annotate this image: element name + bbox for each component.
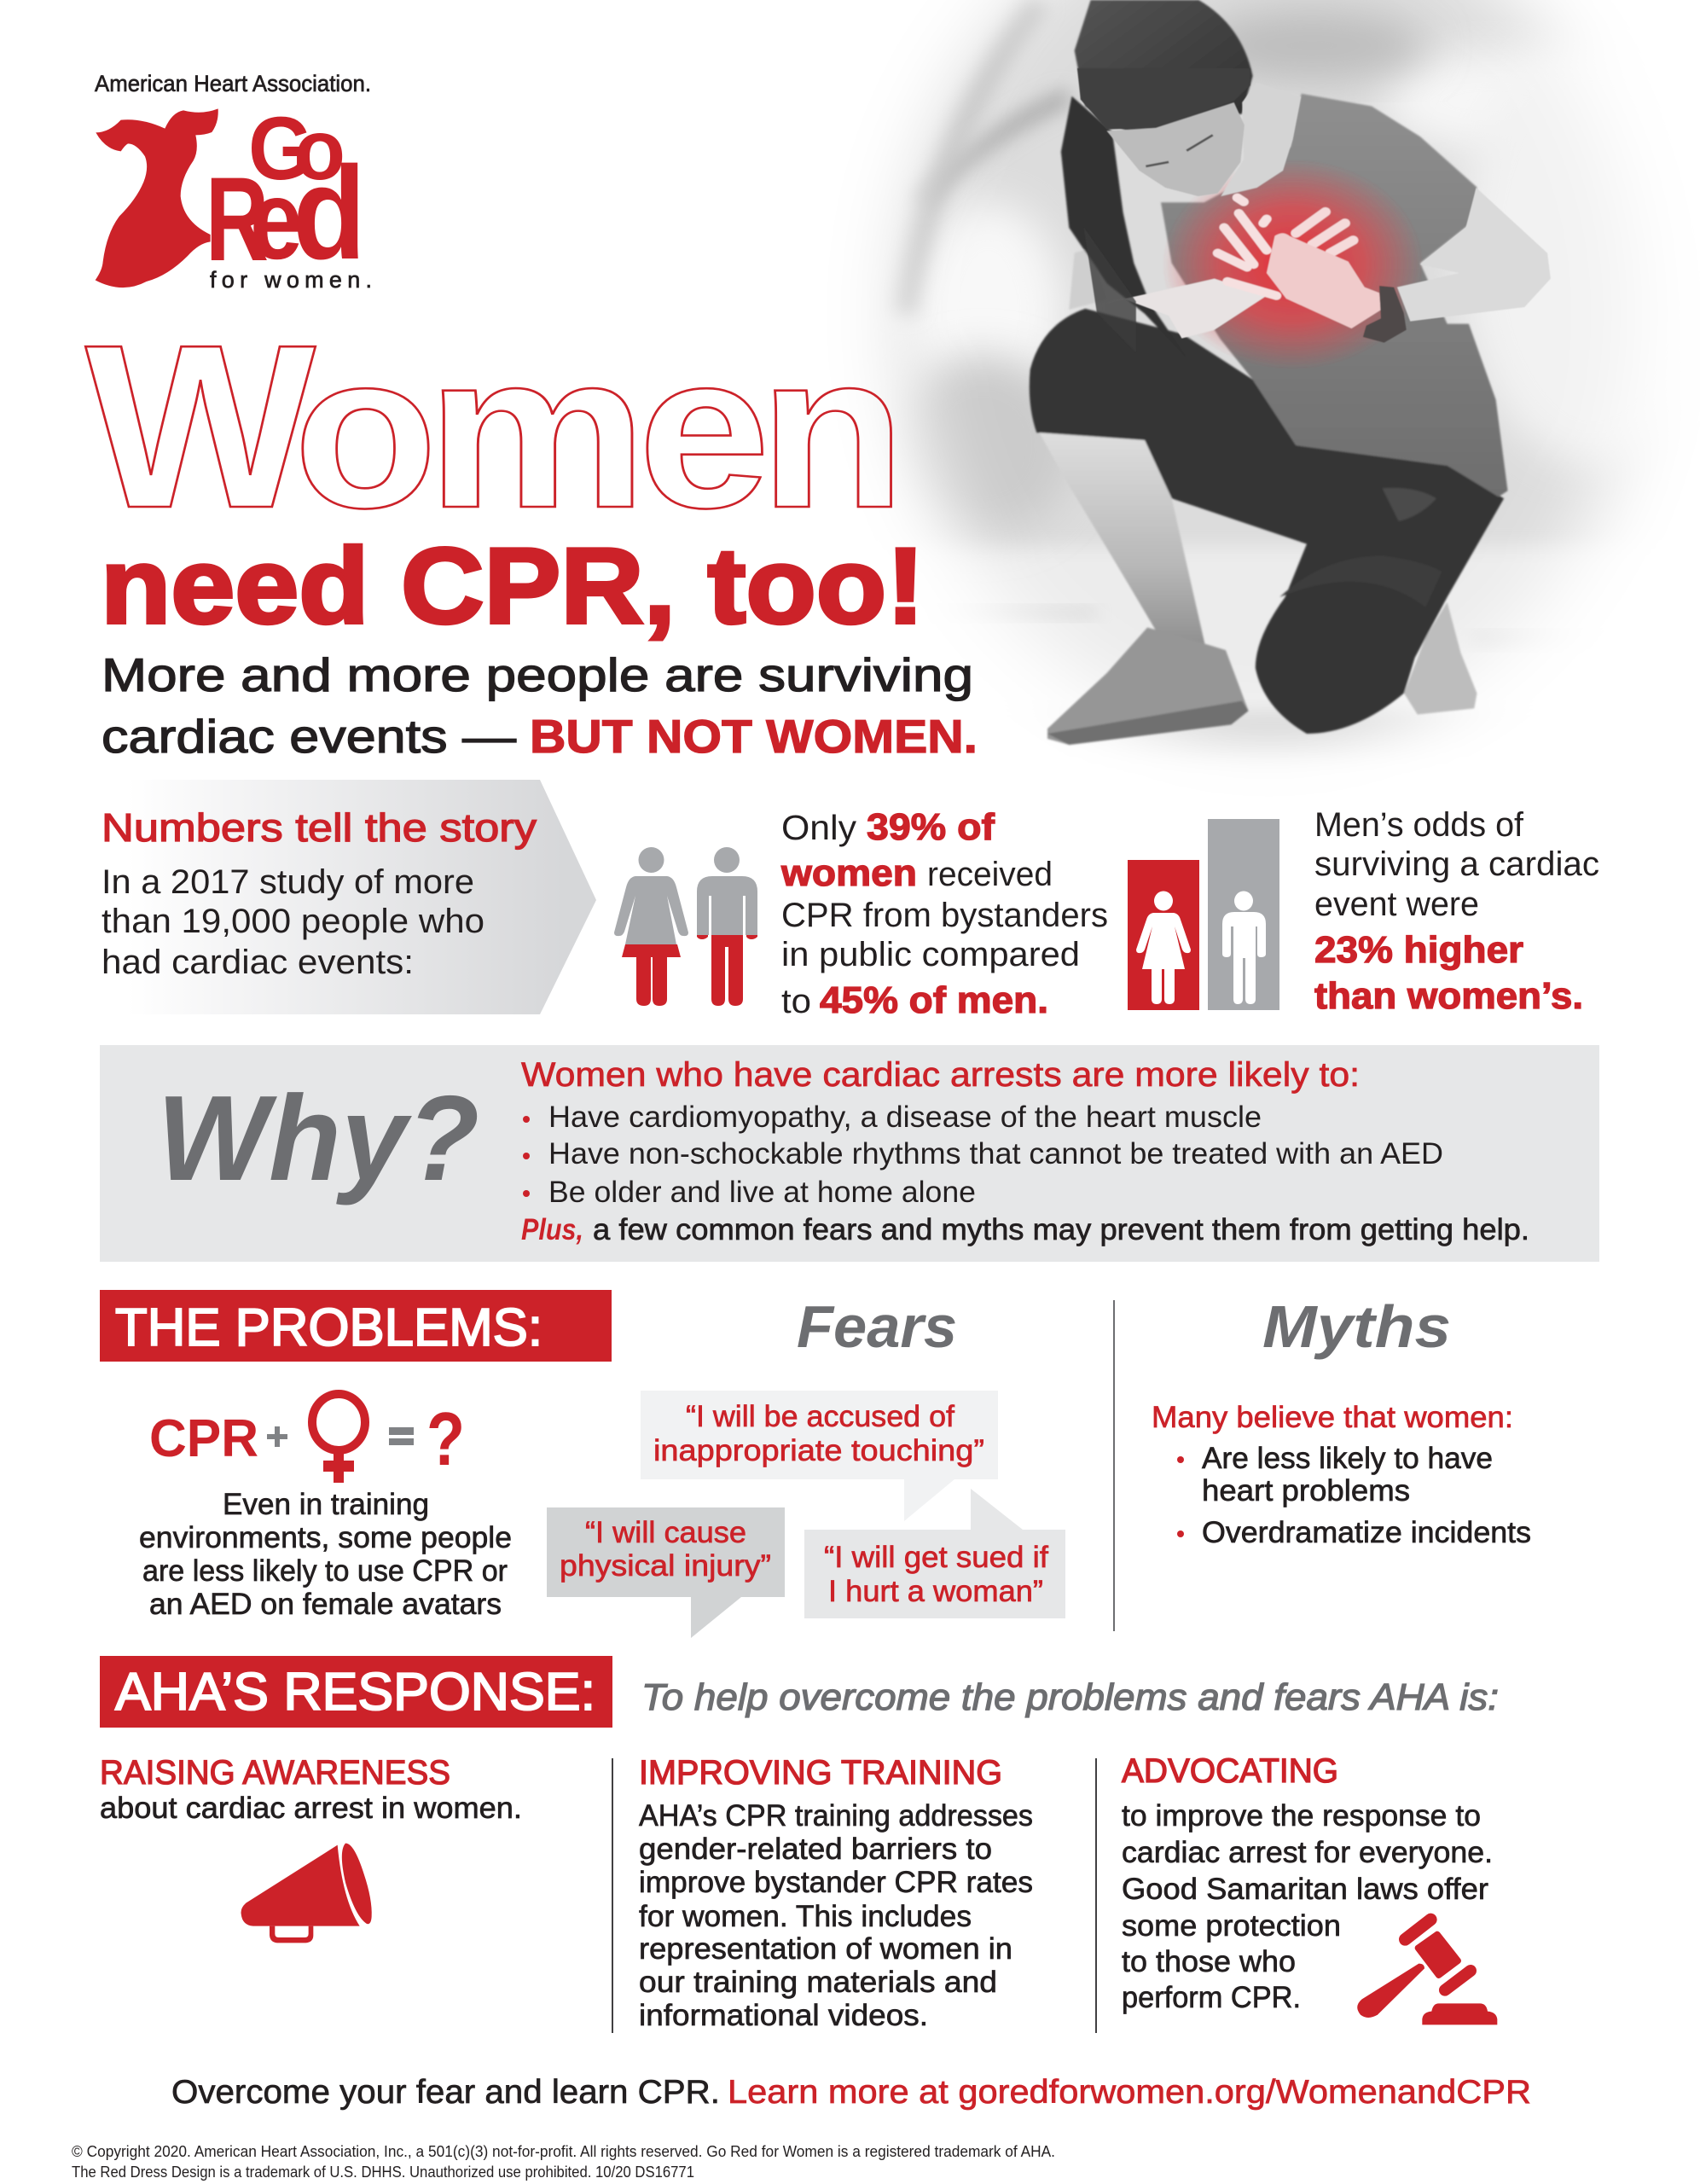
text: 39% of women received CPR: 45% of men. <box>820 979 1048 1021</box>
shin <box>1039 433 1207 653</box>
text: 39% of women received CPR: CPR from bystanders <box>781 897 1108 934</box>
call to action <box>171 2074 1531 2111</box>
left hand fingers <box>1218 198 1276 296</box>
shirt <box>1161 94 1508 497</box>
icon: woman in red bar <box>1136 891 1191 1004</box>
heading: the problems <box>100 1290 612 1362</box>
text: plus: Plus, <box>521 1213 583 1246</box>
title: Women outlined: n <box>759 307 906 554</box>
column: advocating: some protection <box>1122 1909 1341 1943</box>
logo: American Heart Association Go Red for Women: for women. <box>210 267 372 293</box>
speech bubble: physical injury <box>547 1507 785 1638</box>
subtitle: BUT NOT WOMEN. <box>530 710 978 763</box>
title: Women outlined: m <box>426 307 647 554</box>
left forearm <box>1100 279 1267 339</box>
title: Women outlined <box>85 296 906 556</box>
text: 39% of women received CPR: women <box>780 852 917 894</box>
hair <box>1075 0 1253 132</box>
back shoe <box>1404 602 1477 714</box>
column: raising awareness: RAISING AWARENESS <box>100 1754 450 1792</box>
title: Women outlined: o <box>293 307 438 554</box>
Go Red wordmark <box>206 99 366 287</box>
text: myths list: heart problems <box>1202 1474 1410 1507</box>
heading: fears: Fears <box>797 1293 957 1360</box>
speech bubble: sued: I hurt a woman” <box>828 1575 1043 1608</box>
text: training environments <box>139 1488 512 1621</box>
title: need CPR, too!: need CPR, too! <box>101 526 925 646</box>
text: training environments: are less likely to use CPR or <box>142 1554 508 1588</box>
leggings <box>1030 309 1504 734</box>
column: improving training: for women. This includes <box>639 1900 972 1933</box>
icon: megaphone <box>241 1844 372 1943</box>
panel: numbers tell the story arrow: had cardiac events: <box>102 944 414 981</box>
text: training environments: an AED on female avatars <box>149 1588 502 1621</box>
call to action: Learn more at goredforwomen.org/WomenandCPR <box>728 2074 1531 2111</box>
column: advocating: Good Samaritan laws offer <box>1122 1873 1488 1906</box>
call to action: Overcome your fear and learn CPR. <box>171 2074 720 2111</box>
shoe <box>1047 627 1249 745</box>
panel: numbers tell the story arrow: In a 2017 study of more <box>102 863 474 901</box>
text: men's odds 23% higher: Men’s odds of <box>1314 806 1524 844</box>
speech bubble: accused of inappropriate touching: “I will be accused of <box>686 1400 954 1433</box>
column: raising awareness <box>100 1754 522 1943</box>
equation: CPR + female symbol = ? <box>149 1394 465 1483</box>
neck <box>1221 83 1301 196</box>
fingers behind <box>1296 212 1353 253</box>
watch <box>1363 286 1407 343</box>
panel: numbers tell the story arrow <box>102 780 596 1014</box>
ponytail over arm <box>1084 228 1136 352</box>
column: advocating: ADVOCATING <box>1122 1752 1338 1790</box>
title: Women outlined: W <box>85 296 318 556</box>
column: improving training <box>639 1754 1033 2032</box>
column: advocating: to improve the response to <box>1122 1799 1481 1833</box>
Go Red wordmark: d <box>293 139 366 287</box>
text: men's odds 23% higher: surviving a cardiac <box>1314 845 1599 883</box>
text: 39% of women received CPR <box>780 806 1108 1021</box>
text: myths list: Are less likely to have <box>1202 1442 1493 1475</box>
column: advocating: perform CPR. <box>1122 1981 1301 2014</box>
column: improving training: informational videos. <box>639 1999 928 2032</box>
heading: myths: Myths <box>1262 1293 1451 1360</box>
subtitle: cardiac events — <box>102 710 516 763</box>
column: improving training: gender-related barriers to <box>639 1833 992 1866</box>
speech bubble: sued <box>804 1489 1065 1618</box>
icon: woman and man filled to 39% and 45% <box>614 847 757 1006</box>
bullet list: Be older and live at home alone <box>548 1176 976 1209</box>
title: Women outlined: e <box>638 307 770 554</box>
column: advocating: cardiac arrest for everyone. <box>1122 1836 1493 1869</box>
text: men's odds 23% higher: than women’s. <box>1314 975 1583 1017</box>
text: myths list <box>1152 1401 1531 1549</box>
column: advocating <box>1122 1752 1497 2024</box>
logo: American Heart Association Go Red for Women <box>95 71 372 293</box>
icon: gavel <box>1357 1920 1497 2024</box>
heading: the problems: THE PROBLEMS: <box>115 1298 542 1357</box>
heading: AHA's response: AHA’S RESPONSE: <box>115 1663 595 1722</box>
subtitle <box>102 648 978 763</box>
photo: woman kneeling clutching her chest <box>876 0 1632 759</box>
column: advocating: to those who <box>1122 1945 1296 1978</box>
red dress icon <box>96 108 218 288</box>
Go Red wordmark: e <box>250 157 303 282</box>
text: myths list: Overdramatize incidents <box>1202 1516 1531 1549</box>
panel: why <box>100 1045 1599 1262</box>
copyright footer: The Red Dress Design is a trademark of U.S. DHHS. Unauthorized use prohibited. 10/20 DS16771 <box>72 2164 694 2181</box>
column: improving training: IMPROVING TRAINING <box>639 1754 1002 1792</box>
bar chart: survival odds women vs men <box>1128 819 1279 1010</box>
speech bubble: accused of inappropriate touching <box>641 1391 998 1521</box>
heading: Why?: Why? <box>157 1071 479 1206</box>
right hand <box>1267 233 1381 328</box>
text: 39% of women received CPR: received <box>927 856 1053 893</box>
panel: numbers tell the story arrow: Numbers tell the story <box>102 805 537 850</box>
text: men's odds 23% higher <box>1314 806 1599 1017</box>
text: 39% of women received CPR: to <box>781 983 811 1020</box>
Go Red wordmark: G <box>248 99 313 199</box>
text: 39% of women received CPR: Only <box>781 808 857 847</box>
logo: American Heart Association Go Red for Women: American Heart Association. <box>95 71 371 96</box>
text: myths list: Many believe that women: <box>1152 1401 1513 1434</box>
bullet list: Have cardiomyopathy, a disease of the heart muscle <box>548 1101 1262 1134</box>
Go Red wordmark: R <box>206 152 269 286</box>
icon: female symbol <box>312 1394 365 1483</box>
speech bubble: accused of inappropriate touching: inappropriate touching” <box>653 1434 984 1467</box>
upper right arm <box>1397 188 1551 322</box>
column: raising awareness: about cardiac arrest in women. <box>100 1792 522 1825</box>
icon: man in grey bar <box>1222 891 1266 1004</box>
panel: numbers tell the story arrow: than 19,000 people who <box>102 903 484 940</box>
Go Red wordmark: o <box>294 102 345 198</box>
copyright footer <box>72 2143 1055 2181</box>
speech bubble: physical injury: physical injury” <box>560 1549 771 1583</box>
face <box>1106 102 1245 196</box>
text: training environments: environments, some people <box>139 1521 512 1554</box>
equation: CPR + female symbol = ?: CPR <box>149 1409 258 1468</box>
column: improving training: improve bystander CPR rates <box>639 1866 1033 1899</box>
copyright footer: © Copyright 2020. American Heart Association, Inc., a 501(c)(3) not-for-profit. All rights reserved. Go Red for Women is a registered trademark of AHA. <box>72 2143 1055 2160</box>
speech bubble: physical injury: “I will cause <box>585 1516 746 1549</box>
text: 39% of women received CPR: 39% of <box>867 806 995 848</box>
column: improving training: AHA’s CPR training addresses <box>639 1799 1033 1833</box>
text: training environments: Even in training <box>223 1488 429 1521</box>
bullet list <box>523 1101 1443 1209</box>
subtitle: More and more people are surviving <box>102 648 973 701</box>
column: improving training: our training materials and <box>639 1966 997 1999</box>
text: to help overcome: To help overcome the problems and fears AHA is: <box>641 1676 1499 1718</box>
text: 39% of women received CPR: in public compared <box>781 936 1080 973</box>
text: plus: a few common fears and myths may prevent them from getting help. <box>593 1213 1529 1246</box>
text: men's odds 23% higher: 23% higher <box>1314 929 1523 971</box>
speech bubble: sued: “I will get sued if <box>824 1541 1048 1574</box>
left upper arm <box>1069 248 1107 310</box>
bullet list: Have non-schockable rhythms that cannot be treated with an AED <box>548 1137 1443 1170</box>
column: improving training: representation of women in <box>639 1932 1012 1966</box>
chest and hands detail <box>1077 68 1551 369</box>
heading: women more likely: Women who have cardiac arrests are more likely to: <box>521 1056 1360 1094</box>
text: men's odds 23% higher: event were <box>1314 886 1479 923</box>
equation: CPR + female symbol = ?: ? <box>426 1397 465 1481</box>
